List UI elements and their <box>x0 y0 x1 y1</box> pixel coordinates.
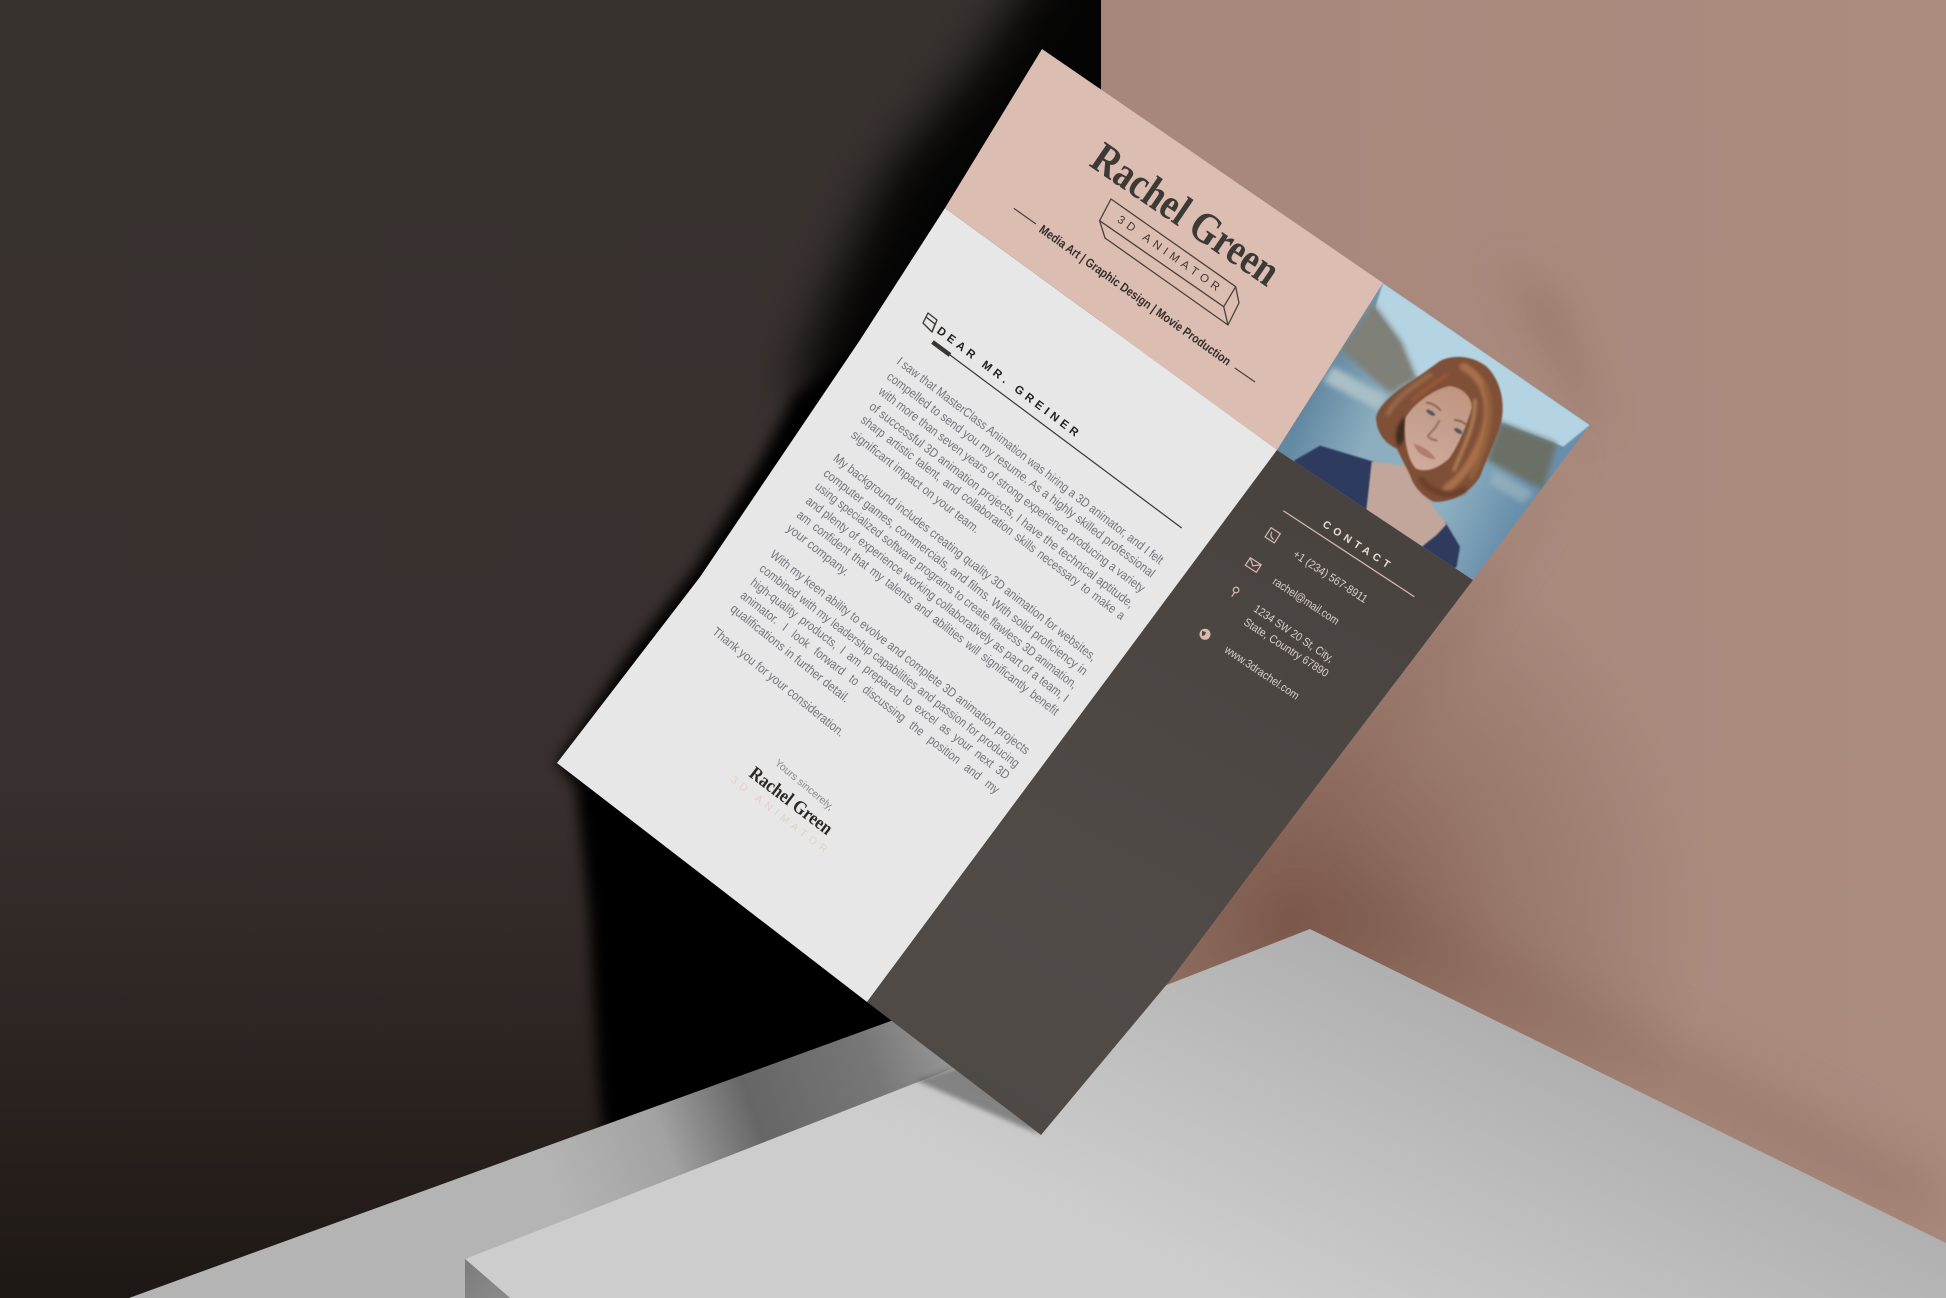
hair <box>1376 357 1503 502</box>
paragraph 3: With my keen ability to evolve and complete 3D animation projects <box>767 547 1033 757</box>
hair dark lobe <box>1396 417 1406 447</box>
floor: block top <box>465 929 1946 1298</box>
contact heading: CONTACT <box>1320 519 1393 571</box>
paragraph 1: I saw that MasterClass Animation was hiring a 3D animator, and I felt <box>894 354 1167 567</box>
hair highlights <box>1388 367 1490 494</box>
closing line: Thank you for your consideration. <box>710 624 848 740</box>
title box: 3D Animator: 3D ANIMATOR <box>1115 214 1222 294</box>
paragraph 1: of successful 3D animation projects, I have the technical aptitude, <box>866 399 1137 611</box>
floor: block side <box>465 1259 510 1298</box>
paragraph 1: sharp artistic talent, and collaboration skills necessary to make a <box>858 412 1129 623</box>
paragraph 1: significant impact on your team. <box>848 427 983 536</box>
tagline rule left <box>1014 208 1036 224</box>
face <box>1405 386 1472 470</box>
paragraph 2: your company. <box>784 520 853 579</box>
paragraph 1: with more than seven years of strong experience producing a variety <box>875 383 1149 596</box>
clothing <box>1294 445 1461 568</box>
panel: pink header <box>945 49 1383 450</box>
paper shadow on floor <box>915 1060 1041 1135</box>
paragraph 2: My background includes creating quality 3D animation for websites, <box>831 450 1100 664</box>
paragraph 3: qualifications in further detail. <box>728 601 853 705</box>
photo: portrait of woman at a lake <box>1270 283 1590 600</box>
title box: 3D Animator <box>1100 199 1239 325</box>
paragraph 2: using specialized software programs to create flawless 3D animation, <box>812 479 1081 692</box>
contact details: State, Country 67890 <box>1241 616 1330 680</box>
contact block <box>1200 511 1414 703</box>
paragraph 3: animator. I look forward to discussing the position and my <box>738 588 1003 797</box>
icon: globe <box>1200 629 1210 640</box>
paragraph 3: combined with my leadership capabilities and passion for producing <box>757 561 1023 770</box>
tagline rule right <box>1235 368 1255 382</box>
neck and chest <box>1367 462 1447 547</box>
letter body text <box>710 354 1167 797</box>
floor: lower level <box>129 960 1050 1298</box>
icon: book <box>923 313 937 332</box>
name heading: Rachel Green <box>1082 133 1289 296</box>
paragraph 1: compelled to send you my resume. As a highly skilled professional <box>884 369 1158 580</box>
heading: Dear Mr. Greiner: DEAR MR. GREINER <box>934 325 1081 440</box>
paragraph 2: computer games, commercials, and films. With solid proficiency in <box>821 465 1091 678</box>
panel: dark contact <box>867 450 1473 1135</box>
icon: phone <box>1265 528 1280 543</box>
icon: envelope <box>1245 558 1261 572</box>
resume sheet <box>557 49 1590 1135</box>
paragraph 2: and plenty of experience working collaboratively as part of a team, I <box>803 493 1072 705</box>
icon: location pin <box>1229 586 1240 598</box>
contact details <box>1221 549 1369 703</box>
contact details: +1 (234) 567-8911 <box>1290 549 1369 606</box>
paragraph 2: am confident that my talents and abilities will significantly benefit <box>794 507 1062 719</box>
tagline: Media Art | Graphic Design | Movie Production <box>1037 222 1234 368</box>
contact rule <box>1283 511 1414 597</box>
contact details: www.3drachel.com <box>1221 644 1301 703</box>
signature block: Rachel Green <box>745 763 837 840</box>
contact details: 1234 SW 20 St, City, <box>1251 603 1335 665</box>
signature block: Yours sincerely, <box>772 757 836 813</box>
heading underline <box>932 342 1182 528</box>
signature block: 3D ANIMATOR <box>728 774 830 856</box>
facial features <box>1414 403 1469 459</box>
paragraph 3: high-quality products, I am prepared to excel as your next 3D <box>748 575 1013 782</box>
panel: white letter <box>557 208 1277 1002</box>
background: dark wall <box>0 0 1180 1298</box>
contact details: rachel@mail.com <box>1270 576 1341 628</box>
background: rose wall <box>1101 0 1946 1243</box>
